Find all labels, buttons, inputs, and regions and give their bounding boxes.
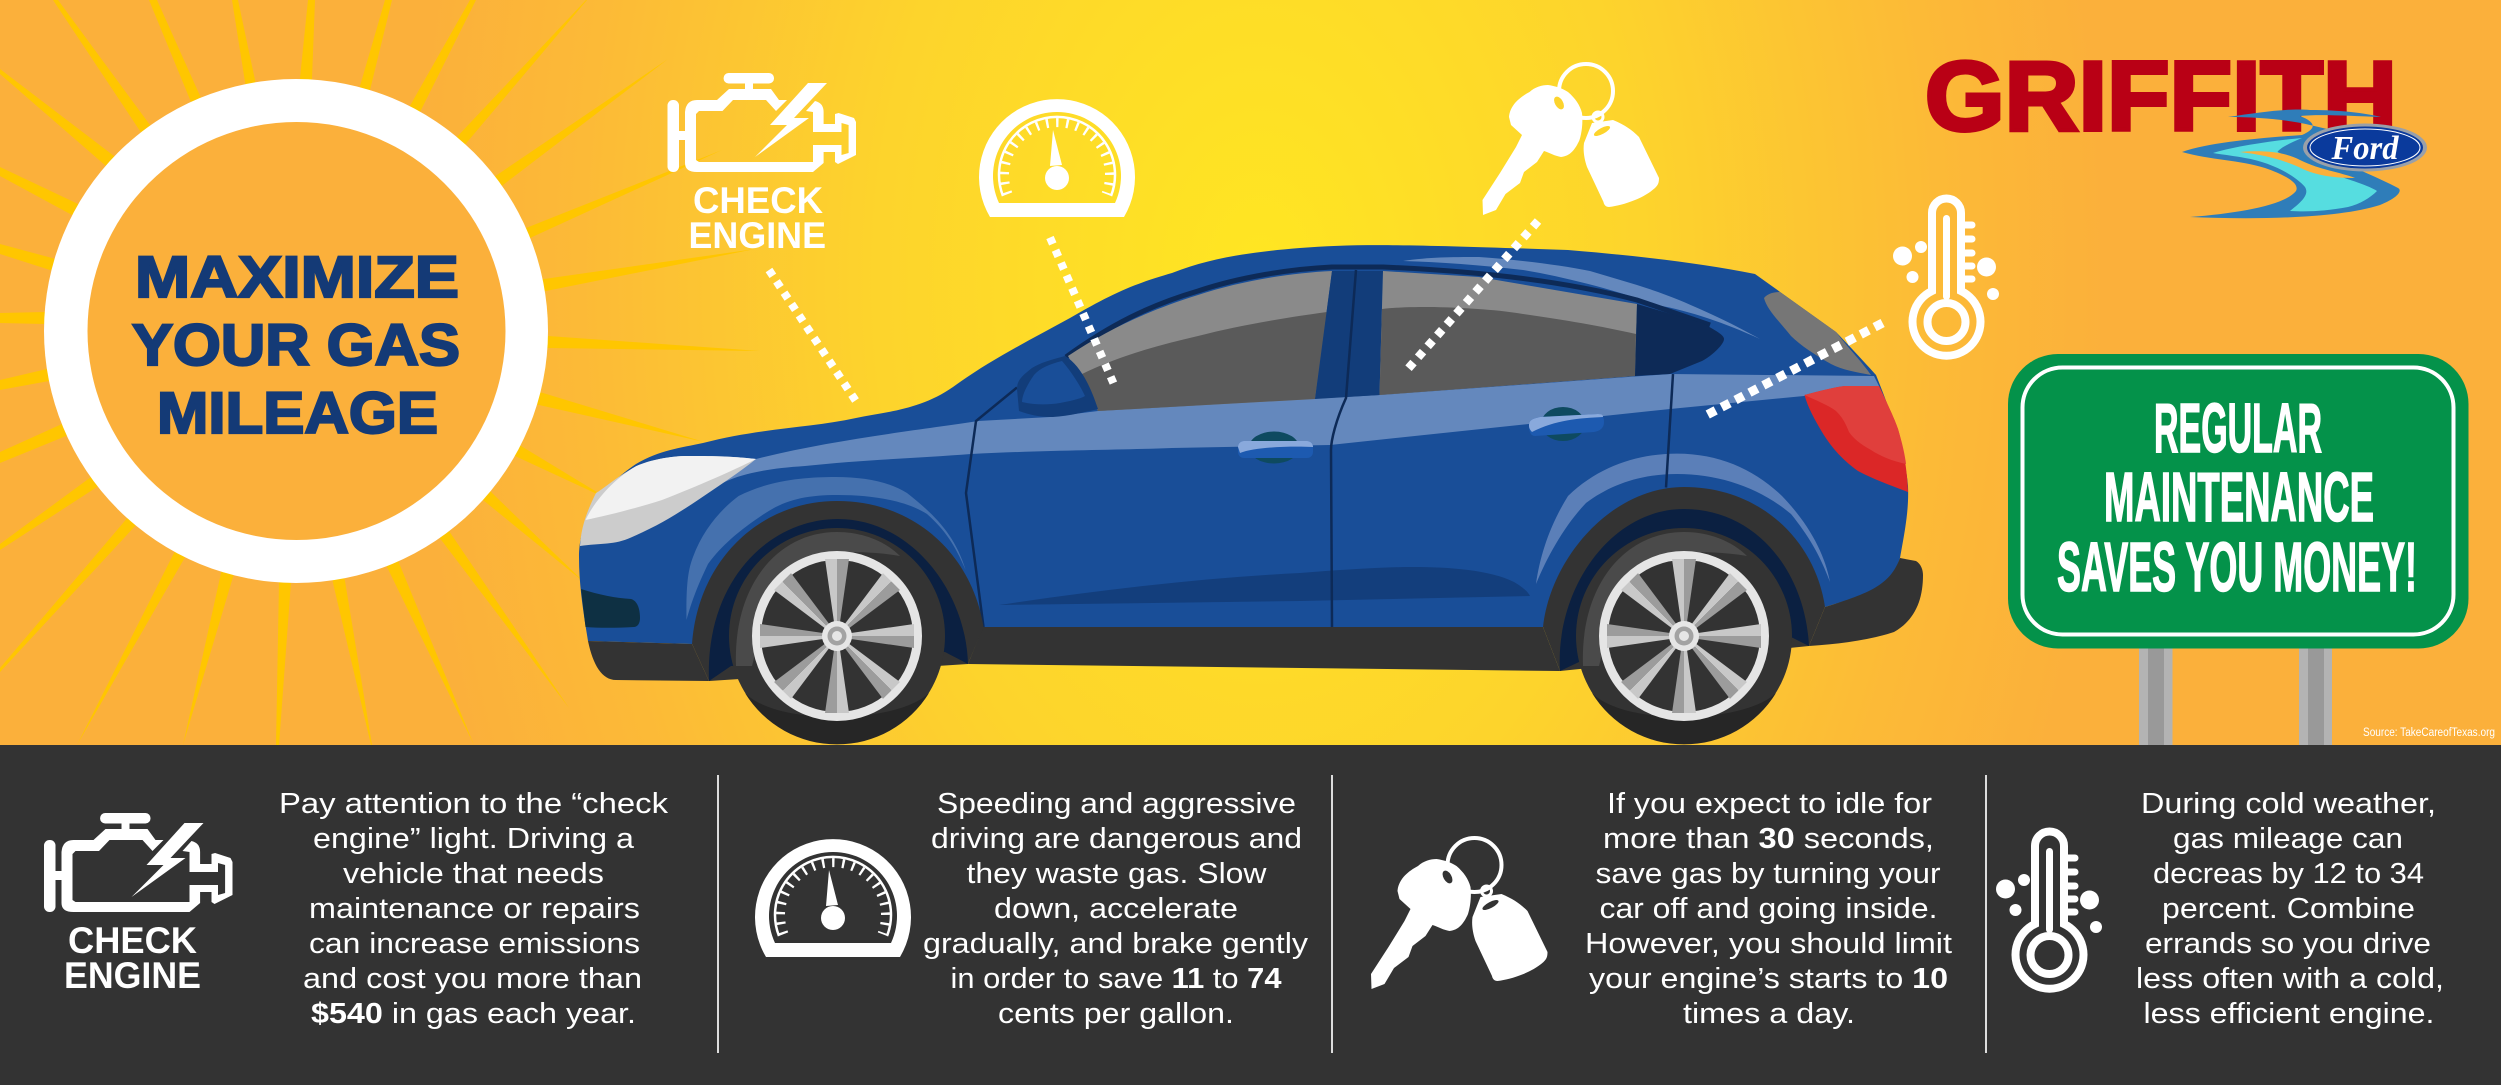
rear wheel (1576, 528, 1792, 744)
road sign (2008, 354, 2468, 745)
dark footer panel (0, 745, 2501, 1085)
rear window (1380, 271, 1637, 395)
text: cold weather tip (2136, 788, 2444, 1030)
rear windshield (1764, 292, 1871, 375)
title text: YOUR GAS (132, 313, 460, 378)
icon: check engine (top) (668, 73, 856, 256)
dotted pointer: thermometer (1703, 323, 1883, 417)
label: check engine: ENGINE (688, 215, 826, 256)
sign posts (2139, 648, 2332, 745)
logo: Griffith Ford (1925, 41, 2427, 218)
text: cold weather tip: less often with a cold, (2136, 963, 2444, 995)
icon: keys (top) (1482, 64, 1659, 215)
side highlight band (698, 374, 1879, 500)
text: check engine tip: can increase emissions (309, 928, 640, 960)
text: cold weather tip: gas mileage can (2173, 823, 2403, 855)
rear bumper (1809, 558, 1923, 646)
rear quarter window (1635, 304, 1724, 376)
divider 1 (717, 775, 719, 1053)
window frame line (1066, 267, 1710, 357)
text: speeding tip: cents per gallon. (998, 998, 1234, 1030)
logo wordmark: GRIFFITH (1925, 41, 2397, 151)
rear wheel arch (1543, 487, 1825, 671)
front wheel arch (692, 501, 984, 681)
label: check engine: ENGINE (64, 955, 201, 996)
dotted pointer: keys (1406, 221, 1538, 371)
text: check engine tip: $540 in gas each year. (311, 998, 636, 1030)
text: check engine tip: and cost you more than (303, 963, 642, 995)
front fender highlight (686, 477, 966, 620)
rear fender highlight (1536, 454, 1830, 584)
text: speeding tip: Speeding and aggressive (937, 788, 1296, 820)
front wheel (729, 528, 945, 744)
dotted pointer: check engine (769, 270, 858, 405)
sign board (2008, 354, 2468, 648)
side sill (968, 627, 1560, 671)
roof highlight (1403, 257, 1760, 339)
background gradient (0, 0, 2501, 745)
text: cold weather tip: decreas by 12 to 34 (2153, 858, 2424, 890)
text: idling tip (1585, 788, 1952, 1030)
logo Ford oval: Ford (2331, 130, 2399, 167)
label: check engine (688, 180, 826, 256)
divider 2 (1331, 775, 1333, 1053)
text: idling tip: more than 30 seconds, (1603, 823, 1934, 855)
title text: MAXIMIZE (135, 245, 459, 310)
text: idling tip: save gas by turning your (1596, 858, 1941, 890)
title text (132, 245, 460, 446)
text: idling tip: times a day. (1683, 998, 1855, 1030)
icon: thermometer (bottom) (1996, 832, 2102, 989)
text: check engine tip: vehicle that needs (343, 858, 604, 890)
sign text: REGULAR (2154, 389, 2322, 467)
car body (579, 245, 1908, 644)
text: cold weather tip: During cold weather, (2141, 788, 2436, 820)
divider 3 (1985, 775, 1987, 1053)
headlight (580, 456, 756, 546)
door lines (966, 270, 1673, 627)
door handle: front (1238, 432, 1313, 464)
front bumper (588, 641, 709, 681)
text: check engine tip (279, 788, 669, 1030)
label: check engine (64, 920, 201, 996)
text: check engine tip: engine” light. Driving a (313, 823, 635, 855)
sign text (2057, 389, 2417, 606)
front window (1068, 271, 1332, 411)
door handle: rear (1529, 407, 1604, 441)
logo river swoosh (2182, 109, 2400, 218)
text: speeding tip: driving are dangerous and (931, 823, 1302, 855)
icon: keys (bottom) (1371, 838, 1548, 989)
text: check engine tip: maintenance or repairs (309, 893, 640, 925)
text: speeding tip (923, 788, 1309, 1030)
text: idling tip: car off and going inside. (1600, 893, 1938, 925)
text: speeding tip: down, accelerate (994, 893, 1238, 925)
icon: thermometer (top) (1893, 198, 1999, 356)
text: idling tip: If you expect to idle for (1607, 788, 1932, 820)
icon: speedometer (bottom) (755, 839, 911, 957)
text: idling tip: your engine’s starts to 10 (1589, 963, 1948, 995)
text: cold weather tip: errands so you drive (2145, 928, 2431, 960)
tail light (1804, 386, 1908, 492)
title badge (44, 79, 548, 583)
icon: speedometer (top) (979, 99, 1135, 217)
text: cold weather tip: less efficient engine. (2144, 998, 2434, 1030)
text: speeding tip: in order to save 11 to 74 (950, 963, 1282, 995)
side mirror (1017, 356, 1098, 417)
label: check engine: CHECK (693, 180, 823, 221)
title text: MILEAGE (157, 381, 438, 446)
text: check engine tip: Pay attention to the “check (279, 788, 669, 820)
label: check engine: CHECK (68, 920, 197, 961)
logo Ford oval (2303, 124, 2427, 172)
dotted pointer: gauge (1050, 238, 1116, 389)
icon: check engine (bottom) (44, 813, 232, 996)
door pillar (1315, 271, 1383, 399)
lower door shadow (999, 567, 1530, 605)
fog light (581, 589, 640, 628)
sun rays (0, 0, 760, 745)
text: idling tip: However, you should limit (1585, 928, 1952, 960)
text: cold weather tip: percent. Combine (2162, 893, 2415, 925)
car (579, 245, 1923, 744)
text: speeding tip: they waste gas. Slow (966, 858, 1268, 890)
text: speeding tip: gradually, and brake gently (923, 928, 1309, 960)
